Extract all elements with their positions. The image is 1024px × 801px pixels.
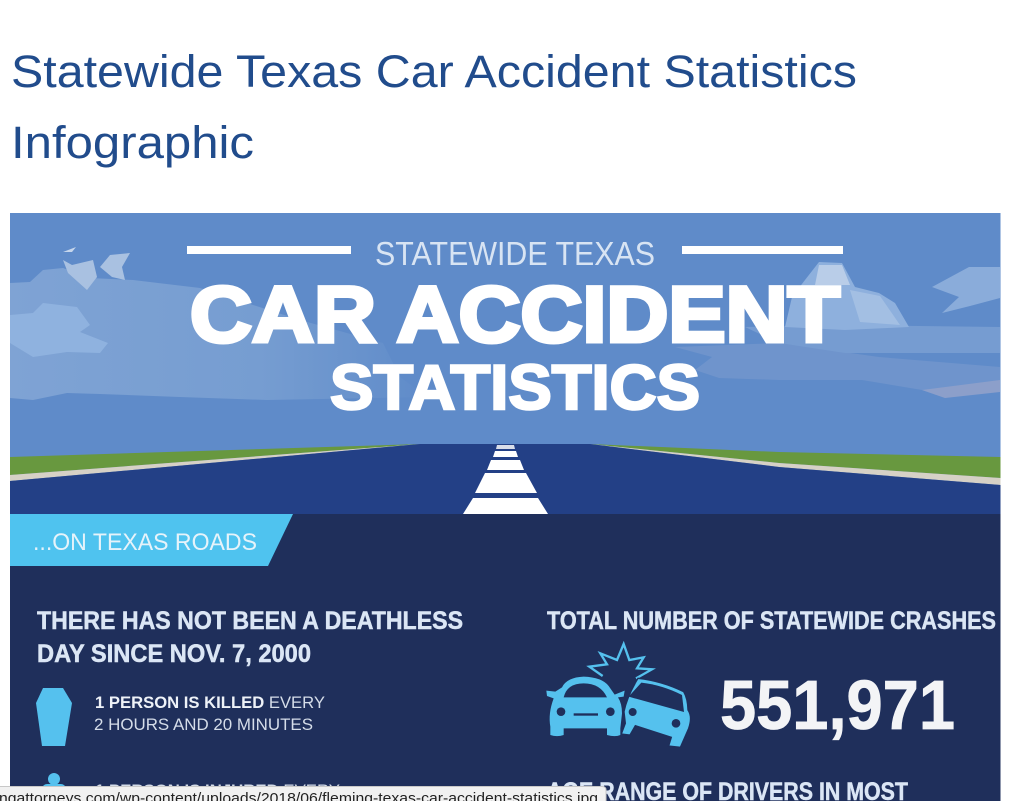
page title (11, 46, 857, 168)
road dashes (463, 445, 548, 514)
left clouds (10, 247, 427, 400)
header title: car accident: CAR ACCIDENT (190, 270, 840, 358)
text: injured statistic: 1 PERSON IS INJURED EVERY (95, 781, 340, 800)
text: killed statistic: 2 HOURS AND 20 MINUTES (94, 715, 313, 734)
header eyebrow: STATEWIDE TEXAS (375, 235, 655, 272)
heading: deathless day (37, 607, 463, 668)
section banner: ...ON TEXAS ROADS (33, 529, 257, 556)
header title: statistics: STATISTICS (330, 353, 700, 423)
road scene (10, 444, 1000, 514)
page title: Statewide Texas Car Accident Statistics (11, 46, 857, 97)
icon: crashed cars (546, 644, 691, 747)
text: killed statistic (94, 693, 325, 734)
icon: coffin (36, 688, 72, 746)
statistic: total crashes: 551,971 (720, 666, 955, 744)
right clouds (675, 262, 1000, 398)
section banner (10, 514, 293, 566)
heading: deathless day: THERE HAS NOT BEEN A DEATHLESS (37, 607, 463, 635)
panel: dark statistics section (10, 514, 1000, 801)
page title: Infographic (11, 117, 254, 168)
panel: sky header (10, 213, 1000, 514)
heading: deathless day: DAY SINCE NOV. 7, 2000 (37, 640, 311, 668)
icon: person (42, 773, 66, 801)
text: killed statistic: 1 PERSON IS KILLED EVERY (95, 693, 325, 712)
decorative bars (187, 246, 843, 254)
